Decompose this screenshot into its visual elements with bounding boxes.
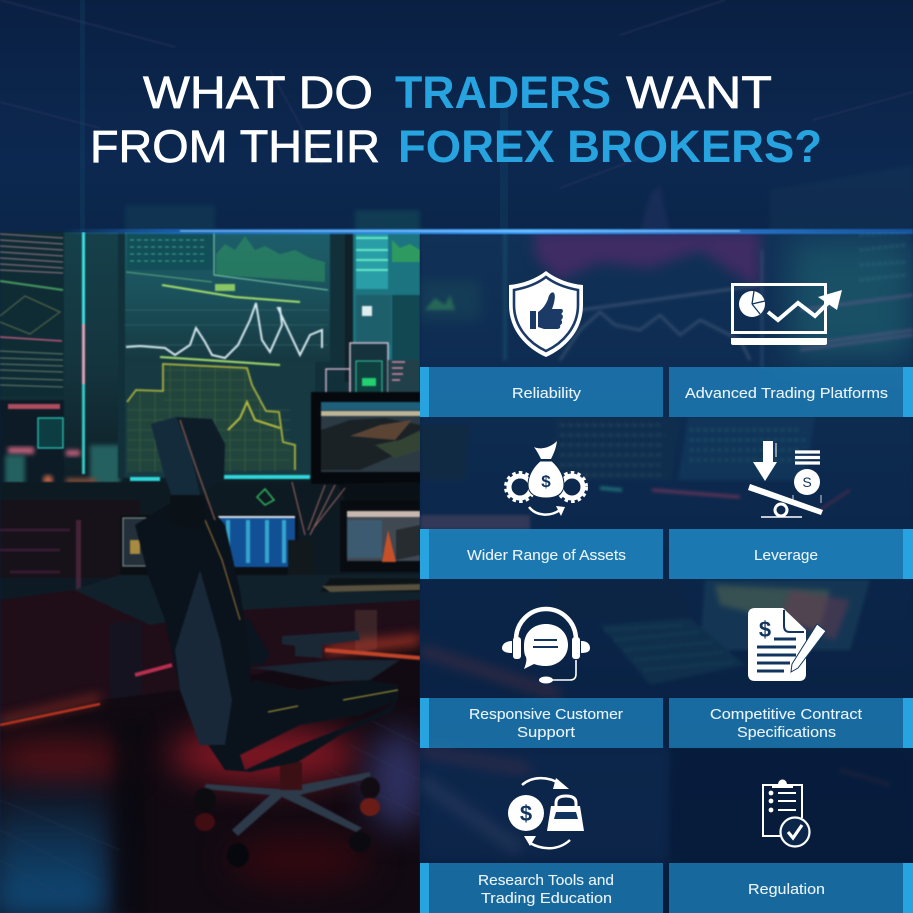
panel: research tools and trading education: Research Tools and xyxy=(478,873,614,889)
data grid xyxy=(127,232,213,270)
title: WHAT DO xyxy=(143,67,373,118)
blue floor reflection xyxy=(0,770,110,913)
title: FOREX BROKERS? xyxy=(398,121,822,172)
panel: responsive customer support: Responsive Customer xyxy=(469,707,623,723)
chair back xyxy=(135,500,252,770)
cyan horizontal neon xyxy=(130,477,160,481)
main wall display xyxy=(118,232,345,478)
icon: shield with thumbs up xyxy=(509,271,583,357)
icon: money bag with gears: $ xyxy=(541,472,551,491)
icon: contract document and pen xyxy=(748,608,826,681)
left wall screen xyxy=(0,232,120,498)
header background xyxy=(0,0,913,232)
yellow outlined area chart xyxy=(127,364,295,472)
icon: leverage scale xyxy=(748,441,823,517)
icon: clipboard with check xyxy=(763,780,810,846)
icon: currency exchange with shopping bag: $ xyxy=(520,801,532,826)
title: FROM THEIR xyxy=(90,121,380,172)
desk monitors xyxy=(120,500,420,577)
lower wall and desk back xyxy=(2,481,123,500)
seat and frame xyxy=(220,680,398,772)
floor xyxy=(0,640,420,913)
armrest xyxy=(282,631,360,658)
panel: research tools and trading education: Trading Education xyxy=(481,891,612,907)
panel: reliability xyxy=(420,367,663,417)
lower screens and keyboard xyxy=(420,580,870,695)
panel: advanced trading platforms: Advanced Trading Platforms xyxy=(685,386,888,402)
candlestick chart xyxy=(125,310,328,345)
photo overlay: right side blurred trading desk xyxy=(420,232,913,913)
panel: regulation: Regulation xyxy=(748,882,825,898)
panel: wider range of assets: Wider Range of Assets xyxy=(467,548,626,564)
right monitor xyxy=(311,392,426,500)
title: WANT xyxy=(626,67,772,118)
chair base xyxy=(204,772,371,836)
icon: laptop with trend arrow xyxy=(731,284,842,345)
title: TRADERS xyxy=(395,67,611,118)
middle screens xyxy=(420,417,850,530)
bottom dark zone xyxy=(420,747,913,863)
icon: currency exchange with shopping bag xyxy=(508,778,584,848)
panel: advanced trading platforms xyxy=(669,367,913,417)
icon: headset with chat bubble xyxy=(502,609,590,684)
chair xyxy=(135,417,400,867)
panel: leverage: Leverage xyxy=(754,548,818,564)
icon: money bag with gears xyxy=(506,441,586,516)
panel: reliability: Reliability xyxy=(512,386,582,402)
panel: competitive contract specifications: Specifications xyxy=(737,725,836,741)
panel: leverage xyxy=(669,529,913,579)
photo: trading room with chair xyxy=(0,232,428,913)
title xyxy=(90,67,822,172)
panel: research tools and trading education xyxy=(420,863,663,913)
desk surface xyxy=(76,574,314,594)
cyan vertical neon xyxy=(82,232,85,324)
panel: responsive customer support xyxy=(420,698,663,748)
red under-desk zone xyxy=(0,590,420,720)
panel: responsive customer support: Support xyxy=(517,725,575,741)
wheels xyxy=(194,777,380,867)
panel: competitive contract specifications: Competitive Contract xyxy=(710,707,862,723)
cables xyxy=(292,482,345,535)
panel: wider range of assets xyxy=(420,529,663,579)
glow line under header xyxy=(60,229,913,234)
headrest xyxy=(176,416,226,478)
panel: regulation xyxy=(669,863,913,913)
right wall screen xyxy=(324,232,420,393)
icon: contract document and pen: $ xyxy=(759,617,771,642)
top row charts xyxy=(420,232,913,368)
green area chart xyxy=(216,236,325,282)
green ring emblem xyxy=(257,489,274,505)
icon: leverage scale: S xyxy=(802,474,812,490)
back wall xyxy=(0,232,350,460)
panel: competitive contract specifications xyxy=(669,698,913,748)
